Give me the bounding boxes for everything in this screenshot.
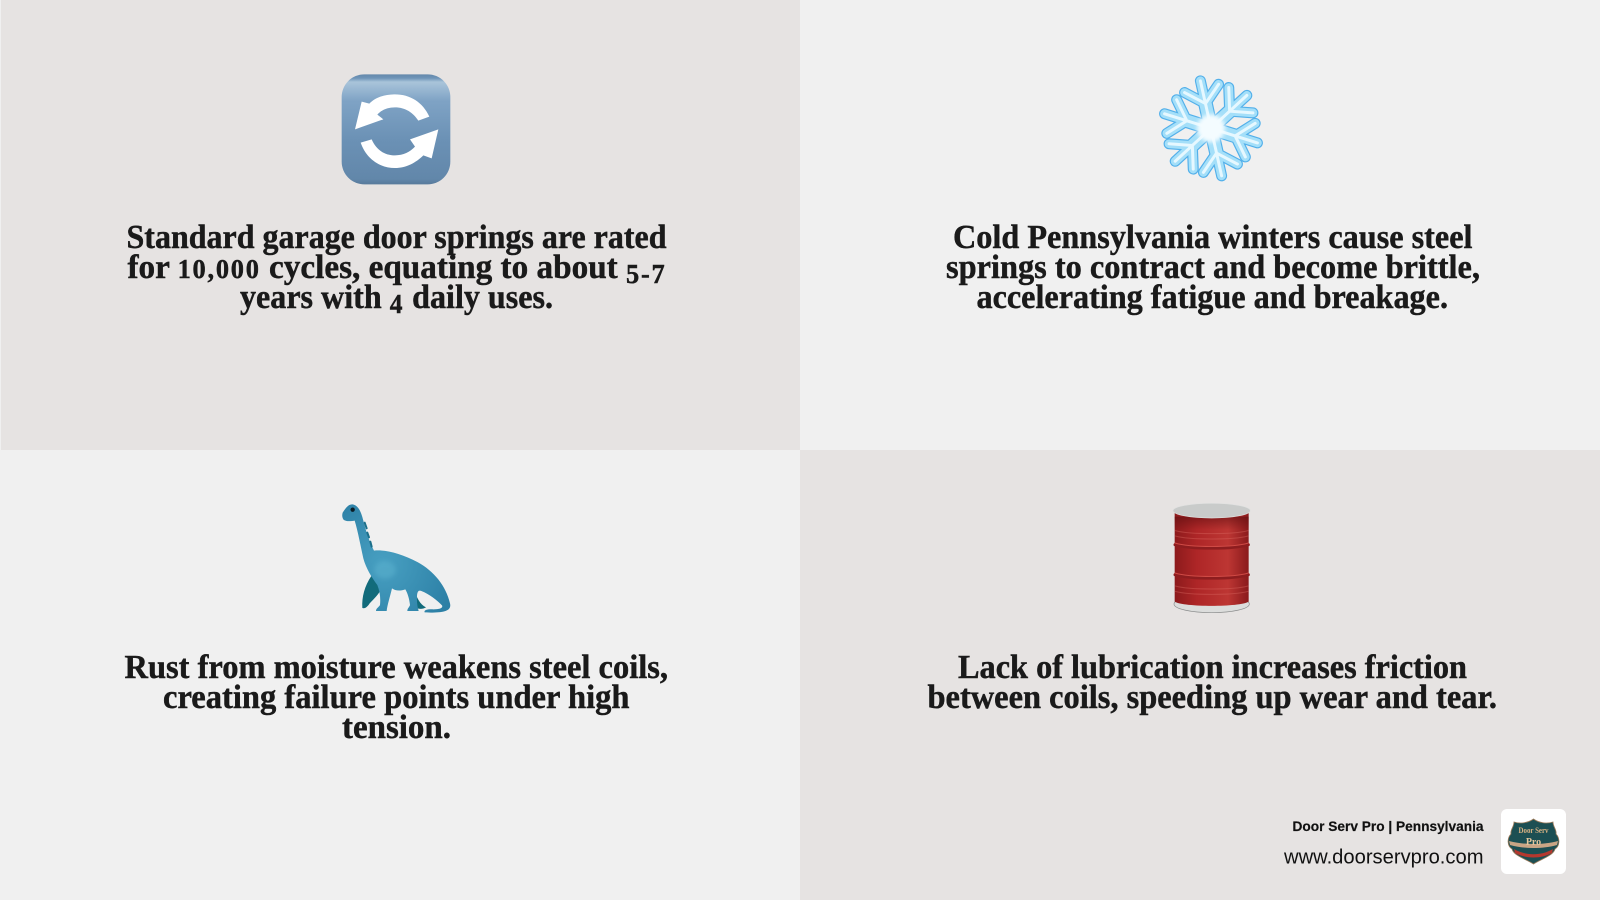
text: lubrication: Lack of lubrication increases friction (958, 649, 1467, 686)
icon: refresh arrows (342, 74, 450, 184)
panel: spring cycles (1, 0, 800, 450)
brand footer (1283, 809, 1566, 874)
website: www.doorservpro.com (1283, 846, 1484, 868)
text: spring cycles: 4 (390, 289, 404, 319)
logo (1501, 809, 1566, 874)
icon: dinosaur (342, 504, 450, 613)
brand name: Door Serv Pro | Pennsylvania (1292, 818, 1484, 834)
text: rust (124, 649, 668, 746)
text: spring cycles: 5-7 (626, 259, 666, 289)
text: lubrication: between coils, speeding up wear and tear. (928, 679, 1497, 716)
text: spring cycles (126, 219, 667, 319)
text: lubrication (928, 649, 1497, 716)
panel: rust (1, 450, 800, 900)
text: cold winters (946, 219, 1480, 316)
panel: cold winters (800, 0, 1600, 450)
text: spring cycles: daily uses. (404, 279, 553, 316)
text: rust: creating failure points under high (163, 679, 630, 716)
icon: snowflake (1150, 70, 1272, 187)
text: spring cycles: Standard garage door springs are rated (126, 219, 667, 256)
logo: Door Serv (1518, 826, 1548, 835)
text: rust: Rust from moisture weakens steel coils, (124, 649, 668, 686)
logo: Pro (1526, 837, 1541, 848)
text: cold winters: accelerating fatigue and breakage. (976, 279, 1448, 316)
icon: oil barrel (1173, 503, 1250, 613)
text: spring cycles: for 10,000 cycles, equating to about (128, 249, 626, 286)
text: rust: tension. (342, 709, 451, 746)
panel: lubrication (800, 450, 1600, 900)
text: cold winters: springs to contract and become brittle, (946, 249, 1480, 286)
text: spring cycles: years with (240, 279, 390, 316)
text: cold winters: Cold Pennsylvania winters cause steel (953, 219, 1472, 256)
